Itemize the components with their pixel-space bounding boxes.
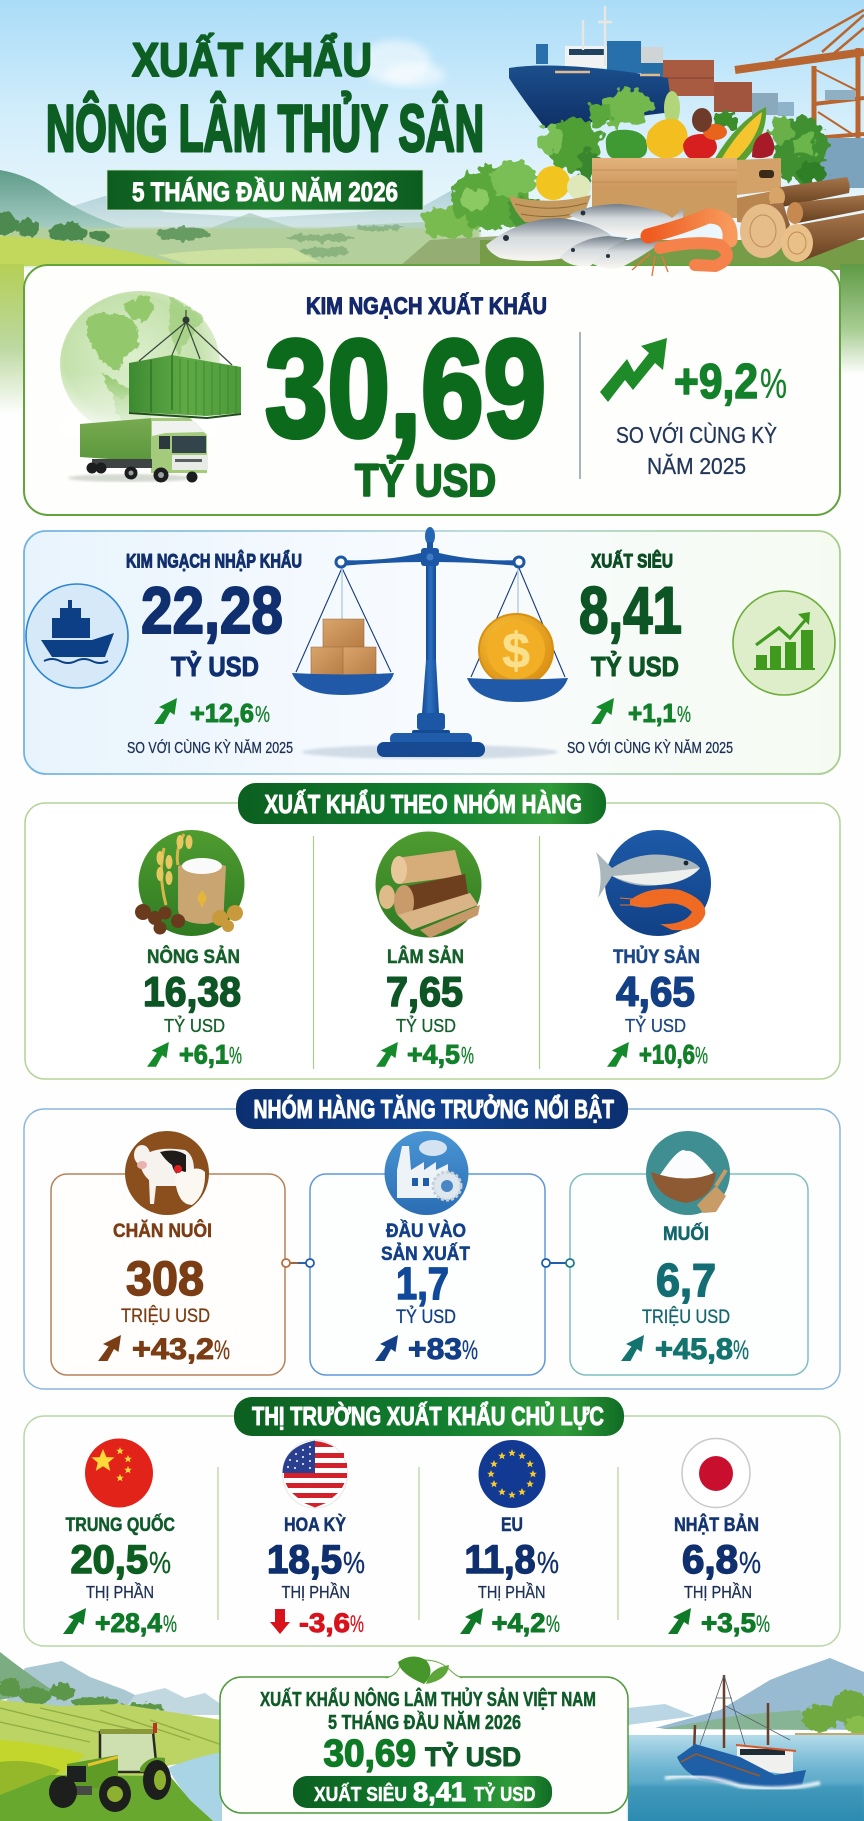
share: %	[537, 1545, 559, 1580]
boxes	[323, 619, 364, 647]
panel: main export value	[24, 265, 840, 515]
strings	[296, 568, 565, 677]
surplus pill	[293, 1776, 552, 1808]
market: Japan	[668, 1438, 770, 1638]
balance scale	[292, 527, 568, 759]
label: SẢN XUẤT	[381, 1243, 470, 1265]
icon: up arrow	[375, 1335, 398, 1361]
growth value: %	[760, 360, 787, 407]
icon: up arrow	[98, 1335, 121, 1361]
footer value: TỶ USD	[425, 1740, 521, 1772]
subtitle badge	[107, 170, 423, 210]
unit: TỶ USD	[164, 1015, 225, 1036]
comparison note: SO VỚI CÙNG KỲ NĂM 2025	[127, 740, 293, 757]
market: United States	[267, 1440, 365, 1638]
shrimp	[648, 216, 730, 240]
surplus growth: %	[677, 701, 691, 727]
growth: %	[163, 1611, 177, 1638]
logs	[740, 177, 864, 262]
flag: USA	[282, 1440, 348, 1508]
icon: timber	[376, 832, 482, 938]
red pepper	[683, 134, 717, 160]
title: NÔNG LÂM THỦY SÂN	[46, 91, 484, 165]
icon: factory and gear	[384, 1131, 468, 1215]
share label: THỊ PHẦN	[478, 1581, 546, 1602]
share: 6,8	[682, 1538, 738, 1582]
surplus heading: XUẤT SIÊU	[591, 548, 673, 572]
growth: %	[462, 1335, 478, 1365]
growth: %	[695, 1042, 708, 1070]
growth: %	[461, 1042, 474, 1070]
growth: +83	[408, 1333, 462, 1366]
value: 30,69: 30,69	[265, 312, 546, 466]
label: NÔNG SẢN	[147, 946, 240, 968]
footer value	[324, 1733, 521, 1775]
country name: TRUNG QUỐC	[66, 1514, 175, 1536]
column: forestry	[376, 832, 482, 1070]
import unit: TỶ USD	[171, 650, 259, 682]
surplus pill: 8,41	[413, 1777, 466, 1807]
panel: standout growth groups	[24, 1089, 840, 1389]
hull	[509, 66, 672, 128]
footer card	[220, 1656, 628, 1813]
flag: China	[85, 1438, 153, 1508]
column: fishery	[596, 830, 711, 1070]
icon: up arrow	[154, 698, 177, 724]
share: 20,5	[70, 1538, 148, 1582]
icon: down arrow	[270, 1609, 290, 1634]
card: salt	[570, 1131, 808, 1375]
heading pill	[234, 1397, 624, 1436]
country name: NHẬT BẢN	[674, 1514, 759, 1536]
comparison note	[616, 422, 777, 479]
bottom right landscape: sea and fishing boat	[628, 1658, 864, 1821]
icon: up arrow	[621, 1335, 644, 1361]
label: MUỐI	[663, 1223, 709, 1245]
growth: -3,6	[299, 1608, 350, 1638]
icon: leaves	[386, 1656, 462, 1684]
subtitle badge: 5 THÁNG ĐẦU NĂM 2026	[132, 176, 398, 207]
container stacks	[662, 60, 714, 96]
heading pill	[236, 1089, 628, 1129]
growth: +3,5	[701, 1608, 756, 1638]
growth: +6,1	[179, 1040, 229, 1070]
coin	[479, 614, 553, 686]
label: export turnover: KIM NGẠCH XUẤT KHẨU	[306, 292, 547, 320]
growth: +10,6	[639, 1040, 695, 1070]
icon: ship	[26, 584, 128, 688]
footer title: XUẤT KHẨU NÔNG LÂM THỦY SẢN VIỆT NAM	[260, 1687, 596, 1711]
pans	[292, 673, 394, 695]
market: China	[63, 1438, 177, 1638]
left greens	[422, 88, 828, 238]
import growth: %	[255, 701, 270, 727]
share label: THỊ PHẦN	[86, 1581, 154, 1602]
unit: TRIỆU USD	[642, 1306, 730, 1328]
yellow pepper	[646, 119, 688, 159]
basket and fruit	[536, 166, 570, 200]
value: 308	[126, 1253, 204, 1306]
icon: rising arrow	[600, 338, 667, 402]
share: 11,8	[464, 1538, 536, 1582]
import value: 22,28	[141, 573, 283, 647]
green pepper	[606, 130, 647, 158]
import heading: KIM NGẠCH NHẬP KHẨU	[126, 548, 302, 572]
surplus value: 8,41	[579, 573, 682, 647]
container	[129, 355, 241, 416]
value: 4,65	[616, 968, 695, 1015]
panel: exports by product group	[25, 783, 840, 1079]
panel: main export markets	[24, 1397, 840, 1646]
growth: +4,5	[407, 1040, 460, 1070]
title	[46, 33, 484, 165]
heading pill: THỊ TRƯỜNG XUẤT KHẨU CHỦ LỰC	[252, 1400, 604, 1431]
growth value: +9,2	[674, 355, 758, 409]
market: EU	[460, 1440, 560, 1638]
pillar and beam	[341, 552, 519, 566]
card: livestock	[51, 1131, 285, 1375]
import growth: +12,6	[190, 698, 254, 728]
bottom left landscape: terraces and tractor	[0, 1652, 222, 1821]
growth: %	[733, 1335, 749, 1365]
growth: %	[546, 1611, 560, 1638]
value: 7,65	[386, 968, 463, 1015]
comparison note: NĂM 2025	[647, 453, 746, 479]
country name: HOA KỲ	[284, 1514, 346, 1536]
heading pill: NHÓM HÀNG TĂNG TRƯỞNG NỔI BẬT	[254, 1093, 614, 1124]
growth: +4,2	[492, 1608, 546, 1638]
surplus pill: XUẤT SIÊU	[314, 1782, 407, 1806]
icon: up arrow	[460, 1608, 483, 1634]
illustration: globe, container and truck	[60, 291, 241, 482]
growth: +28,4	[95, 1608, 162, 1638]
icon: salt bowl	[646, 1131, 730, 1215]
fishing boat	[665, 1675, 820, 1788]
growth: %	[756, 1611, 770, 1638]
hero produce: vegetables, crate, fish, shrimp, logs	[422, 88, 864, 276]
share label: THỊ PHẦN	[684, 1581, 752, 1602]
icon: up arrow	[607, 1042, 629, 1067]
title: XUẤT KHẨU	[132, 33, 372, 86]
icon: grain sack	[135, 830, 244, 936]
flag: Japan	[682, 1438, 750, 1508]
share: %	[149, 1545, 171, 1580]
icon: up arrow	[591, 698, 614, 724]
tractor	[49, 1723, 171, 1812]
connectors between cards	[282, 1259, 574, 1267]
share: 18,5	[267, 1538, 342, 1582]
column: agriculture	[135, 830, 244, 1070]
label: CHĂN NUÔI	[113, 1220, 212, 1242]
value: 16,38	[143, 968, 241, 1015]
unit: TỶ USD	[355, 455, 496, 506]
icon: up arrow	[147, 1042, 169, 1067]
share label: THỊ PHẦN	[282, 1581, 350, 1602]
icon: cow and chicken	[125, 1131, 209, 1215]
value: 1,7	[396, 1258, 449, 1309]
icon: growth chart	[733, 591, 835, 695]
surplus pill: TỶ USD	[474, 1783, 536, 1806]
ship and port	[509, 6, 864, 188]
unit: TRIỆU USD	[121, 1305, 210, 1327]
label: ĐẦU VÀO	[386, 1220, 466, 1242]
growth: +43,2	[132, 1333, 214, 1366]
fish	[569, 204, 684, 236]
unit: TỶ USD	[396, 1015, 456, 1036]
growth: %	[229, 1042, 242, 1070]
truck	[68, 474, 192, 482]
crane	[735, 10, 864, 140]
growth: %	[350, 1611, 364, 1638]
chili	[752, 132, 774, 158]
icon: up arrow	[668, 1608, 691, 1634]
label: THỦY SẢN	[613, 946, 700, 968]
card: production inputs	[310, 1131, 545, 1375]
share: %	[739, 1545, 761, 1580]
footer title	[260, 1687, 596, 1734]
grass fade left and right of main panel	[0, 264, 864, 414]
growth: %	[214, 1335, 230, 1365]
hoist ropes	[139, 310, 232, 365]
heading pill	[238, 783, 606, 824]
balance scale: $	[502, 623, 530, 679]
flag: EU	[478, 1440, 546, 1508]
heading pill: XUẤT KHẨU THEO NHÓM HÀNG	[264, 789, 582, 819]
corn	[714, 107, 766, 160]
surplus growth: +1,1	[628, 698, 676, 728]
vertical divider	[579, 332, 581, 479]
country name: EU	[501, 1515, 523, 1536]
label: LÂM SẢN	[387, 946, 464, 968]
hero background landscape	[0, 0, 864, 270]
unit: TỶ USD	[625, 1015, 686, 1036]
superstructure	[565, 46, 609, 68]
footer value: 30,69	[324, 1733, 416, 1775]
wooden crate	[592, 158, 737, 195]
comparison note: SO VỚI CÙNG KỲ NĂM 2025	[567, 740, 733, 757]
value: 6,7	[656, 1254, 716, 1306]
surplus unit: TỶ USD	[591, 650, 679, 682]
comparison note: SO VỚI CÙNG KỲ	[616, 422, 777, 448]
growth: +45,8	[655, 1333, 733, 1366]
unit: TỶ USD	[396, 1306, 456, 1328]
label	[381, 1220, 470, 1265]
share: %	[343, 1545, 365, 1580]
icon: fish and shrimp	[596, 830, 711, 936]
panel: import and trade surplus	[24, 527, 840, 774]
icon: up arrow	[376, 1042, 398, 1067]
footer title: 5 THÁNG ĐẦU NĂM 2026	[328, 1711, 521, 1734]
icon: up arrow	[63, 1608, 86, 1634]
